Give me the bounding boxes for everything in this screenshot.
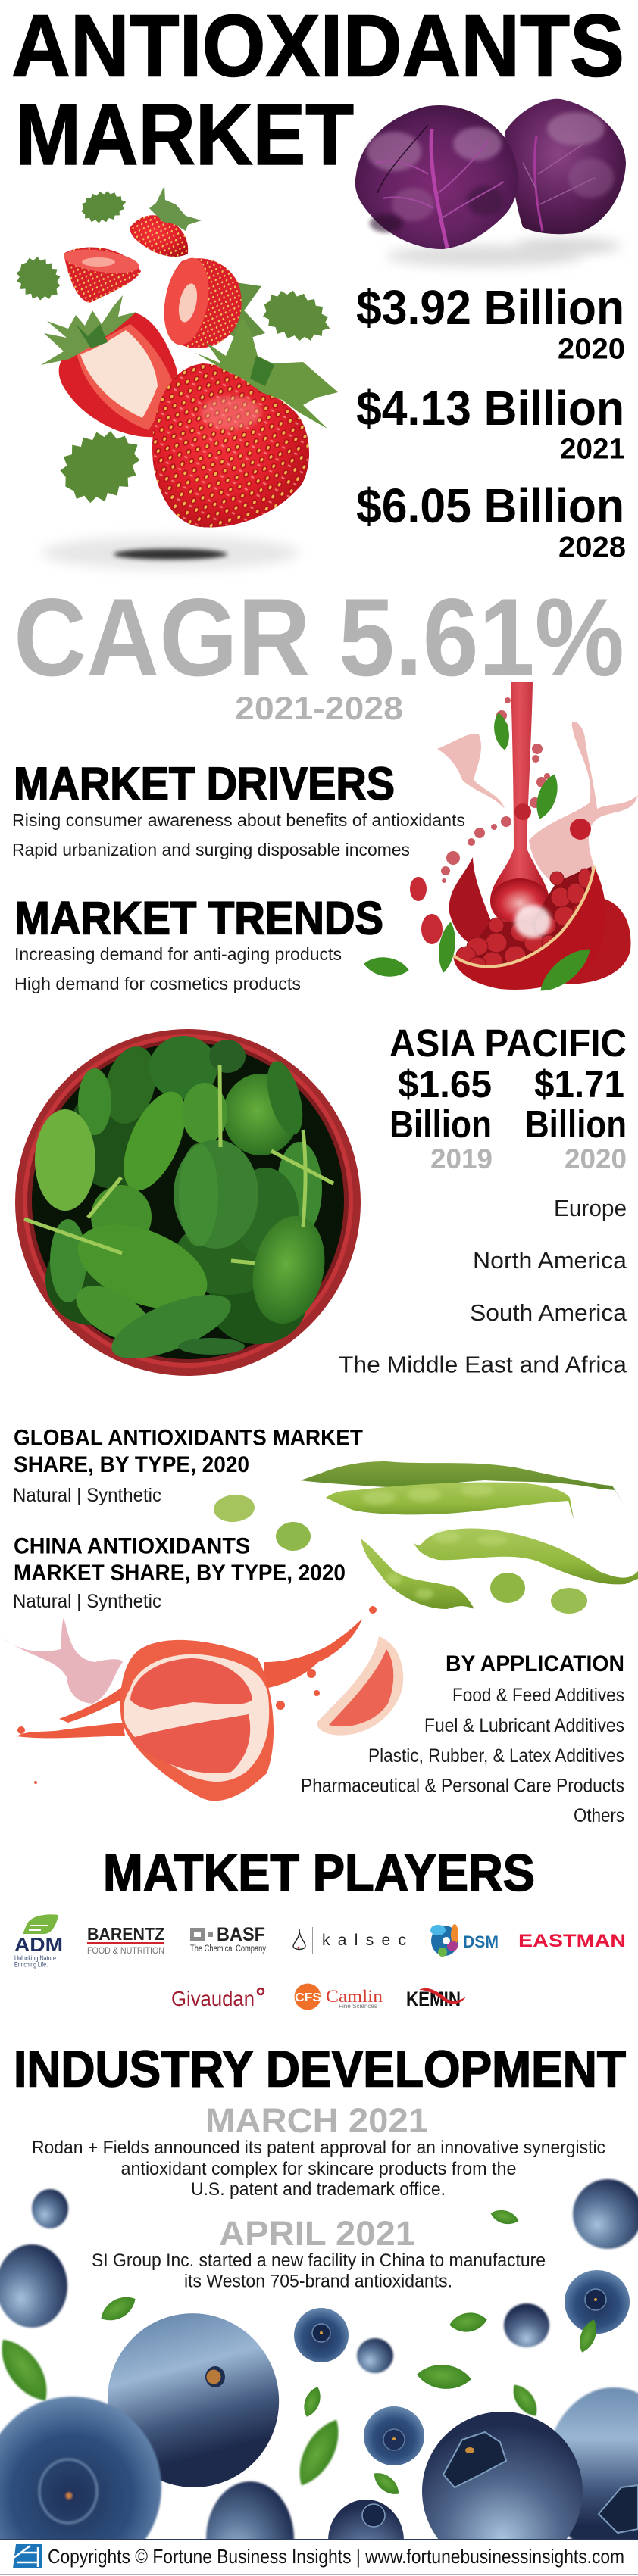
CAGR heading: 2021-2028	[235, 691, 403, 727]
logo: Barentz: FOOD & NUTRITION	[87, 1945, 164, 1956]
2020 value: 2020	[565, 1143, 627, 1174]
pomegranate rind	[453, 866, 606, 990]
region list: The Middle East and Africa	[339, 1351, 627, 1378]
China share by type: Natural | Synthetic	[13, 1591, 161, 1612]
logo: CFS Camlin: CFS	[295, 1991, 321, 2004]
2020 value	[356, 280, 625, 365]
pink juice splashes	[437, 722, 638, 897]
driver items: Rising consumer awareness about benefits of antioxidants	[12, 810, 465, 830]
illustration: falling strawberries and leaves	[8, 186, 338, 569]
driver items: Rapid urbanization and surging disposable incomes	[12, 840, 410, 859]
2020 value: 2020	[558, 333, 625, 365]
halved strawberry	[41, 295, 177, 437]
China share by type	[13, 1534, 346, 1612]
global share by type: GLOBAL ANTIOXIDANTS MARKET	[14, 1425, 363, 1450]
trend items	[14, 944, 342, 993]
pods	[300, 1461, 638, 1609]
grapefruit wedge	[317, 1636, 403, 1736]
development: March 2021: Rodan + Fields announced its patent approval for an innovative synergistic	[32, 2138, 605, 2158]
large right blueberry	[422, 2412, 638, 2571]
green leaves	[363, 712, 597, 999]
logo: BASF: The Chemical Company	[190, 1944, 266, 1954]
application list: Fuel & Lubricant Additives	[424, 1715, 624, 1736]
2021 value	[356, 381, 625, 466]
cut strawberry with stem	[158, 254, 265, 348]
market size figures	[356, 280, 626, 563]
title	[11, 0, 624, 183]
juice splashes	[17, 1606, 377, 1784]
logo: ADM: ADM	[14, 1933, 63, 1956]
market trends	[14, 892, 383, 993]
spinach leaves	[35, 1036, 334, 1371]
logo: DSM: DSM	[463, 1932, 499, 1951]
flying leaves	[0, 2207, 601, 2500]
2019 value: $1.65	[398, 1063, 492, 1106]
region list: South America	[470, 1299, 627, 1326]
development: April 2021: APRIL 2021	[219, 2214, 415, 2253]
region list: Europe	[554, 1195, 627, 1221]
trend items: High demand for cosmetics products	[14, 974, 301, 993]
shadow under strawberries	[42, 536, 299, 569]
market trends: MARKET TRENDS	[14, 892, 383, 943]
pomegranate back	[565, 898, 631, 984]
logo: BASF	[190, 1924, 266, 1954]
development: April 2021: SI Group Inc. started a new facility in China to manufacture	[92, 2250, 546, 2271]
large strawberry	[152, 317, 338, 528]
China share by type: MARKET SHARE, BY TYPE, 2020	[14, 1561, 346, 1586]
market players heading: MATKET PLAYERS	[103, 1844, 535, 1902]
logo: ADM: Unlocking Nature.	[14, 1954, 58, 1963]
pink splash	[2, 1617, 123, 1704]
logo: Barentz: BARENTZ	[87, 1924, 164, 1944]
logo: Eastman: EASTMAN	[518, 1931, 626, 1951]
lower left blueberry	[0, 2397, 161, 2576]
strawberry slice	[63, 245, 141, 303]
logo: Kalsec: kalsec	[322, 1932, 406, 1949]
blueberry calyx berries	[294, 2270, 630, 2465]
China share by type: CHINA ANTIOXIDANTS	[14, 1534, 250, 1559]
market drivers: MARKET DRIVERS	[14, 758, 395, 809]
2019 value: 2019	[430, 1143, 493, 1174]
driver items	[12, 810, 465, 859]
juice bubbles	[441, 697, 550, 883]
logo: ADM	[14, 1914, 63, 1969]
title: MARKET	[15, 87, 354, 183]
logo: Givaudan: Givaudan	[171, 1987, 255, 2010]
2020 value: $1.71	[534, 1063, 624, 1106]
strawberry leaves	[8, 187, 338, 516]
company logos	[14, 1914, 626, 2010]
top strawberry	[130, 186, 202, 257]
2028 value: 2028	[558, 532, 626, 563]
region list: North America	[473, 1247, 627, 1274]
2021 value: 2021	[560, 434, 625, 466]
2020 value: $3.92 Billion	[356, 280, 624, 335]
footer	[0, 2539, 638, 2576]
logo: ADM: Enriching Life.	[14, 1961, 48, 1969]
logo: DSM	[430, 1924, 499, 1957]
region list	[339, 1195, 627, 1378]
logo: Barentz	[87, 1924, 164, 1956]
illustration: pomegranate juice splash	[363, 682, 638, 999]
development: March 2021: U.S. patent and trademark office.	[191, 2179, 446, 2200]
pomegranate seeds	[456, 867, 595, 977]
spinach stems	[24, 1065, 333, 1263]
2020 value	[525, 1063, 627, 1174]
sparkle	[514, 905, 551, 938]
development: April 2021	[92, 2214, 546, 2291]
illustration: grapefruit splash	[2, 1606, 403, 1801]
logo: Kalsec	[293, 1927, 406, 1954]
peas	[213, 1493, 587, 1614]
market drivers	[12, 758, 465, 859]
application list: Others	[574, 1805, 624, 1826]
2019 value: Billion	[389, 1102, 492, 1146]
juice stream and drop	[490, 682, 591, 925]
development: March 2021: MARCH 2021	[205, 2101, 428, 2140]
illustration: blueberries and leaves	[0, 2179, 638, 2576]
2021 value: $4.13 Billion	[356, 381, 624, 435]
development: March 2021	[32, 2101, 605, 2200]
2028 value: $6.05 Billion	[356, 479, 624, 533]
2019 value	[389, 1063, 493, 1174]
logo: CFS Camlin	[294, 1984, 383, 2010]
logo: BASF: BASF	[217, 1924, 265, 1945]
by application	[301, 1651, 624, 1826]
illustration: green pods and peas	[213, 1461, 638, 1614]
application list	[301, 1685, 624, 1826]
global share by type: SHARE, BY TYPE, 2020	[14, 1452, 249, 1477]
development: March 2021: antioxidant complex for skincare products from the	[121, 2159, 517, 2179]
logo: CFS Camlin: Camlin	[326, 1987, 383, 2006]
by application: BY APPLICATION	[446, 1651, 624, 1676]
illustration: red cabbages	[355, 99, 626, 267]
regional share: Asia Pacific: ASIA PACIFIC	[389, 1021, 627, 1065]
trend items: Increasing demand for anti-aging products	[14, 944, 342, 964]
loose seeds	[410, 877, 443, 944]
regional share: Asia Pacific	[389, 1021, 627, 1174]
background blurred berries	[0, 2179, 638, 2576]
logo: CFS Camlin: Fine Sciences	[339, 2003, 377, 2010]
global share by type	[13, 1425, 363, 1506]
development: April 2021: its Weston 705-brand antioxidants.	[184, 2272, 452, 2291]
bottom blueberry	[328, 2500, 404, 2576]
logo: Fortune Business Insights	[13, 2544, 42, 2568]
global share by type: Natural | Synthetic	[13, 1485, 161, 1506]
large central blueberry	[88, 2294, 299, 2506]
application list: Food & Feed Additives	[452, 1685, 624, 1706]
grapefruit section	[120, 1640, 274, 1801]
illustration: bowl of spinach	[15, 1029, 361, 1376]
logo: Kemin: KEMIN	[406, 1988, 461, 2010]
left splash	[449, 857, 500, 949]
2028 value	[356, 479, 626, 563]
